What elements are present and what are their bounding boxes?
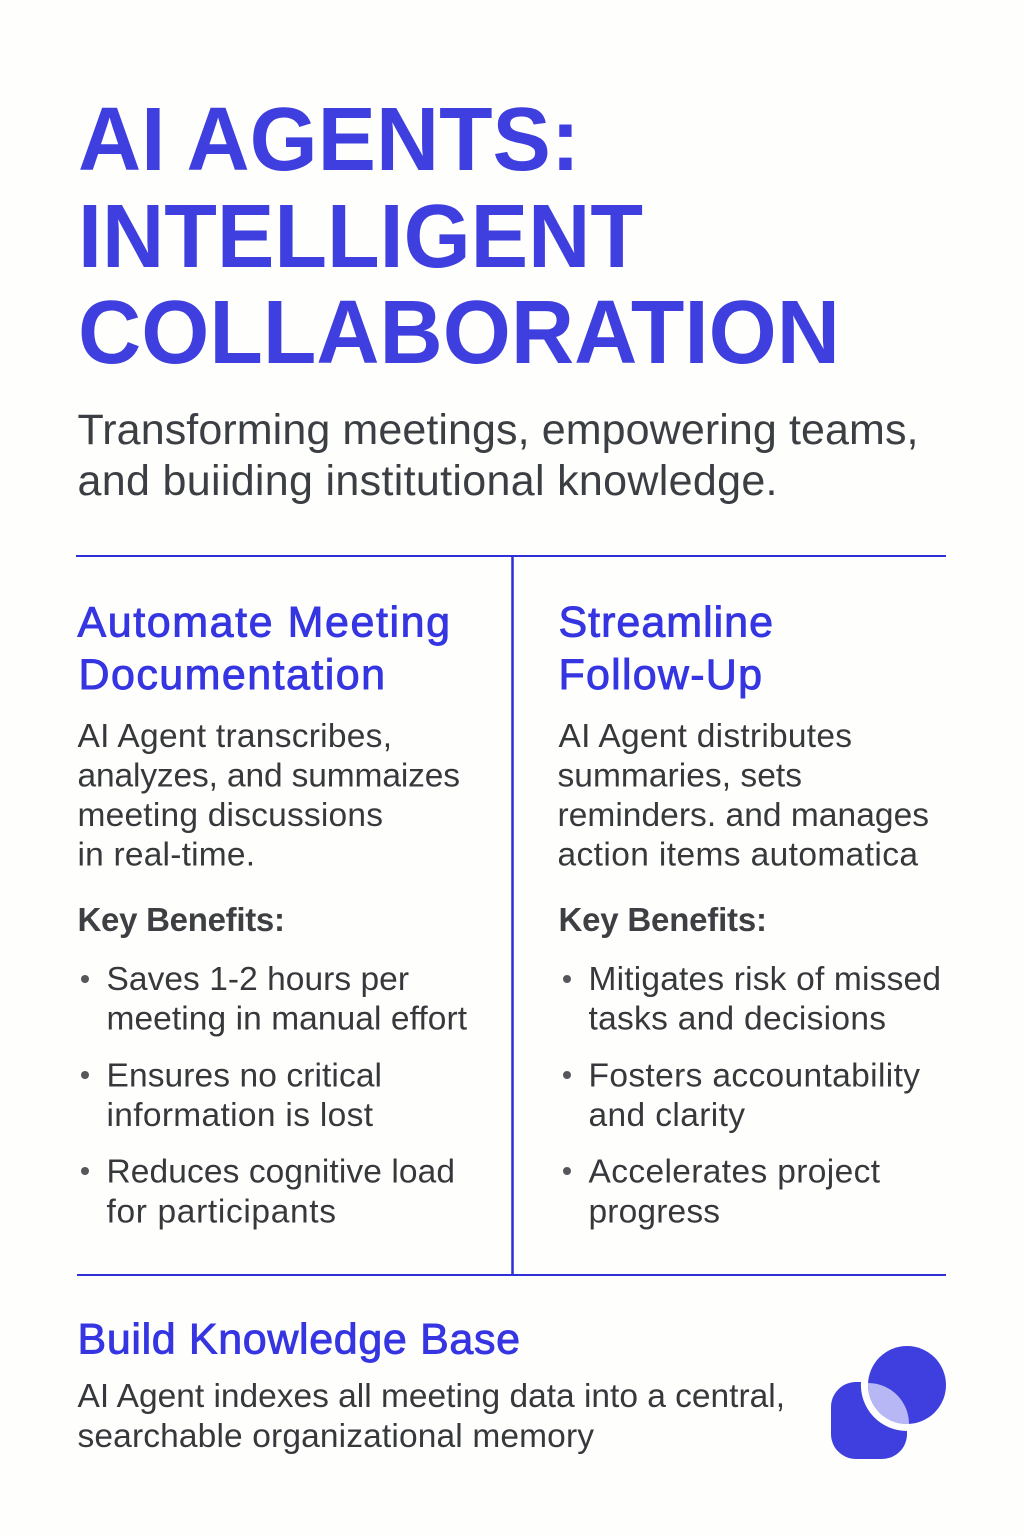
title: AI AGENTS: [78, 90, 580, 190]
title: COLLABORATION [78, 283, 840, 383]
panel: automate meeting documentation [78, 598, 468, 1230]
subtitle: and buiiding institutional knowledge. [78, 457, 778, 505]
panel: build knowledge base [78, 1316, 785, 1455]
key benefits label: Key Benefits: [78, 901, 285, 938]
description: documentation: AI Agent transcribes, [78, 718, 392, 755]
heading: streamline follow-up: Streamline [558, 598, 773, 646]
benefits list: and clarity [588, 1097, 745, 1134]
description: documentation: analyzes, and summaizes [78, 758, 460, 794]
benefits list: progress [588, 1194, 720, 1230]
heading: automate meeting documentation: Documentation [78, 651, 385, 699]
description: knowledge base: searchable organizational memory [78, 1418, 594, 1455]
icon: overlapping shapes [831, 1346, 946, 1459]
benefits list: Mitigates risk of missed [588, 961, 941, 998]
description: follow-up: AI Agent distributes [558, 718, 852, 755]
subtitle [78, 406, 918, 505]
title: INTELLIGENT [78, 187, 643, 287]
description: follow-up [558, 718, 929, 874]
benefits list: Reduces cognitive load [106, 1154, 455, 1190]
description: documentation [78, 718, 460, 874]
benefits list: meeting in manual effort [106, 1000, 468, 1038]
heading: automate meeting documentation: Automate Meeting [78, 598, 450, 646]
benefits list: Accelerates project [588, 1154, 881, 1190]
benefits list: Fosters accountability [588, 1058, 920, 1094]
benefits list: information is lost [106, 1097, 374, 1134]
panel: streamline follow-up [558, 598, 941, 1230]
heading: build knowledge base: Build Knowledge Base [78, 1316, 520, 1364]
benefits list [563, 961, 941, 1230]
description: follow-up: summaries, sets [558, 758, 802, 794]
benefits list: Ensures no critical [106, 1058, 382, 1094]
description: documentation: in real-time. [78, 836, 255, 874]
heading: streamline follow-up [558, 598, 773, 699]
subtitle: Transforming meetings, empowering teams, [78, 406, 918, 454]
description: follow-up: reminders. and manages [558, 797, 929, 834]
key benefits label: Key Benefits: [558, 901, 767, 938]
description: documentation: meeting discussions [78, 797, 383, 834]
benefits list: for participants [106, 1194, 336, 1230]
heading: automate meeting documentation [78, 598, 450, 699]
description: knowledge base [78, 1378, 785, 1455]
description: knowledge base: AI Agent indexes all meeting data into a central, [78, 1378, 785, 1415]
benefits list [81, 961, 468, 1230]
benefits list: Saves 1-2 hours per [106, 961, 409, 998]
title [78, 90, 840, 383]
benefits list: tasks and decisions [588, 1000, 886, 1038]
description: follow-up: action items automatica [558, 836, 918, 874]
heading: streamline follow-up: Follow-Up [558, 651, 762, 699]
